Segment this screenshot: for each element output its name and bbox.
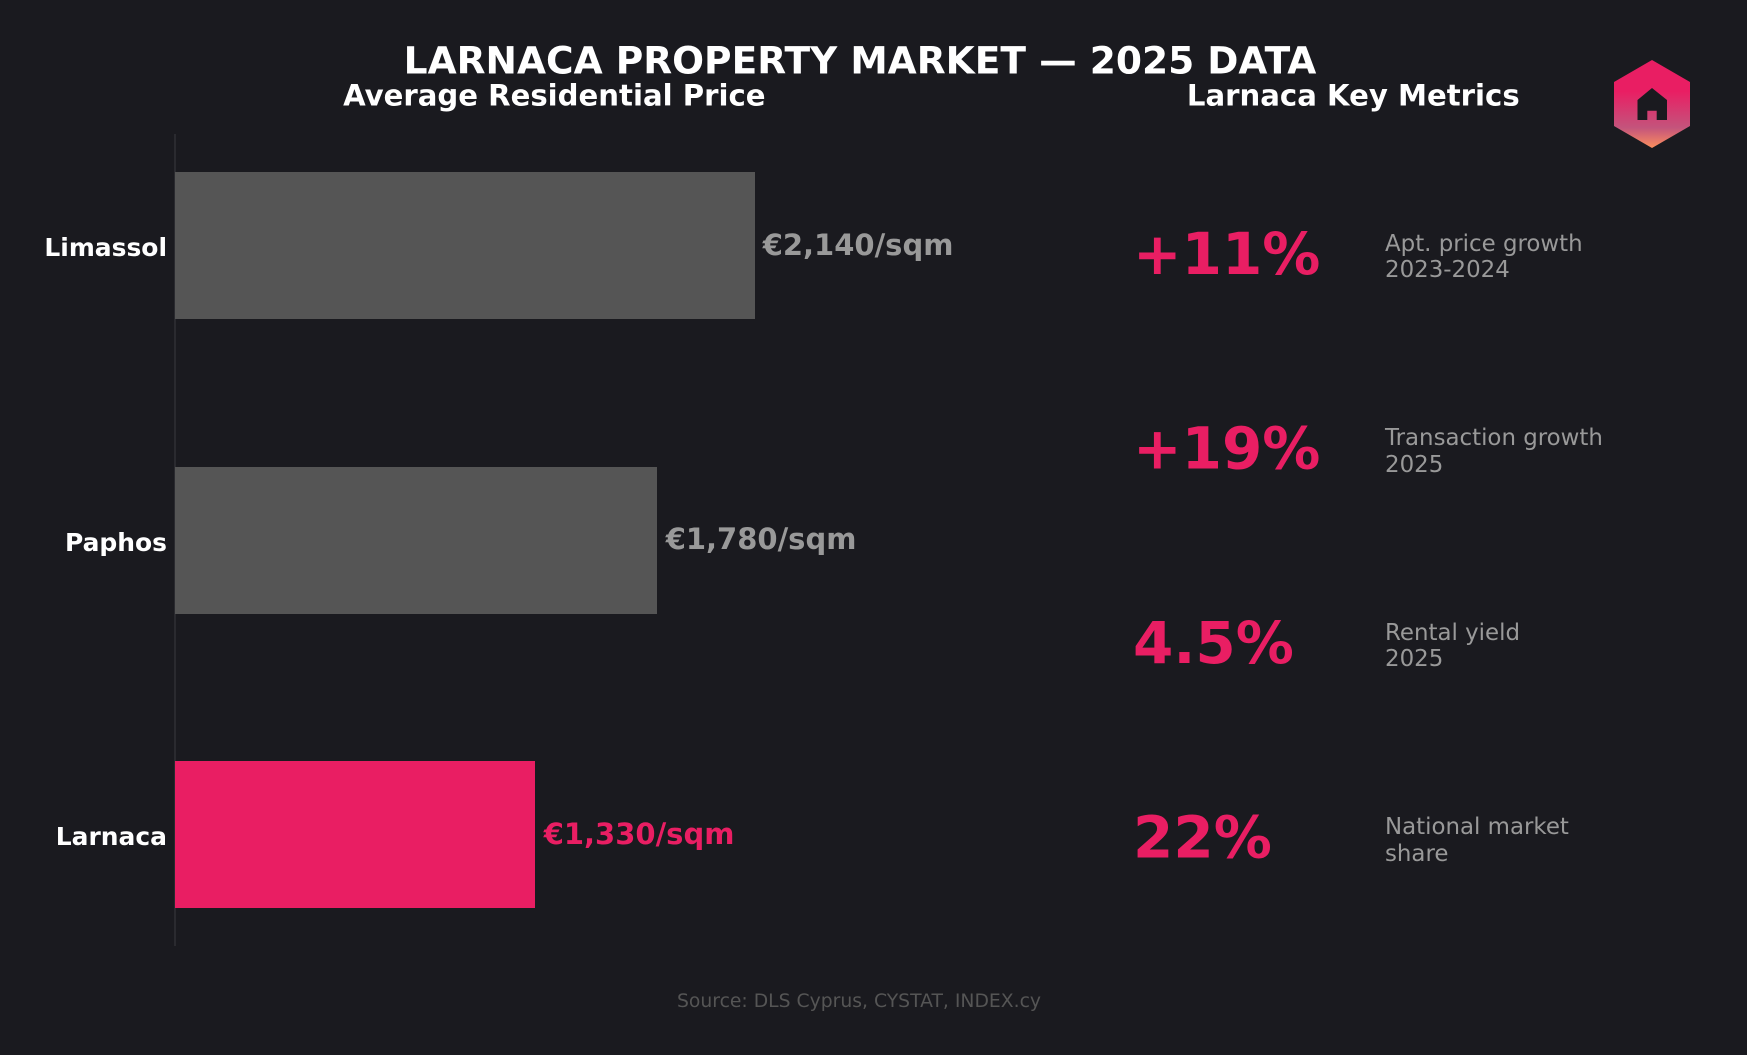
metric: national market share: 22% bbox=[1133, 804, 1272, 872]
key metrics panel bbox=[1133, 220, 1603, 872]
metric: national market share: share bbox=[1385, 841, 1448, 867]
metric: apartment price growth: 2023-2024 bbox=[1385, 257, 1510, 283]
metric: apartment price growth bbox=[1133, 220, 1583, 288]
bar: Larnaca: Larnaca bbox=[56, 822, 167, 851]
source note: Source: DLS Cyprus, CYSTAT, INDEX.cy bbox=[677, 991, 1041, 1012]
metric: rental yield: 4.5% bbox=[1133, 609, 1294, 677]
metric: rental yield: Rental yield bbox=[1385, 620, 1520, 646]
chart axis line bbox=[174, 134, 176, 946]
bar chart: average residential price bbox=[44, 134, 953, 946]
title: LARNACA PROPERTY MARKET — 2025 DATA bbox=[404, 38, 1316, 82]
metric: rental yield bbox=[1133, 609, 1520, 677]
icon: house logo hexagon bbox=[1614, 60, 1690, 148]
bar: Limassol: €2,140/sqm bbox=[762, 228, 953, 262]
bar: Limassol bbox=[44, 172, 953, 319]
metric: transaction growth bbox=[1133, 414, 1603, 482]
bar: Limassol: Limassol bbox=[44, 233, 167, 262]
metric: apartment price growth: +11% bbox=[1133, 220, 1320, 288]
metric: apartment price growth: Apt. price growth bbox=[1385, 231, 1583, 257]
heading: larnaca key metrics: Larnaca Key Metrics bbox=[1187, 78, 1520, 112]
bar: Paphos: €1,780/sqm bbox=[665, 522, 856, 556]
metric: transaction growth: +19% bbox=[1133, 414, 1320, 482]
bar: Paphos bbox=[65, 467, 856, 614]
metric: national market share: National market bbox=[1385, 814, 1569, 840]
metric: national market share bbox=[1133, 804, 1569, 872]
metric: transaction growth: 2025 bbox=[1385, 452, 1443, 478]
bar: Larnaca: €1,330/sqm bbox=[543, 817, 734, 851]
metric: transaction growth: Transaction growth bbox=[1384, 425, 1603, 451]
bar: Paphos: Paphos bbox=[65, 528, 167, 557]
bar: Larnaca bbox=[56, 761, 734, 908]
heading: average residential price: Average Residential Price bbox=[343, 78, 766, 112]
metric: rental yield: 2025 bbox=[1385, 646, 1443, 672]
